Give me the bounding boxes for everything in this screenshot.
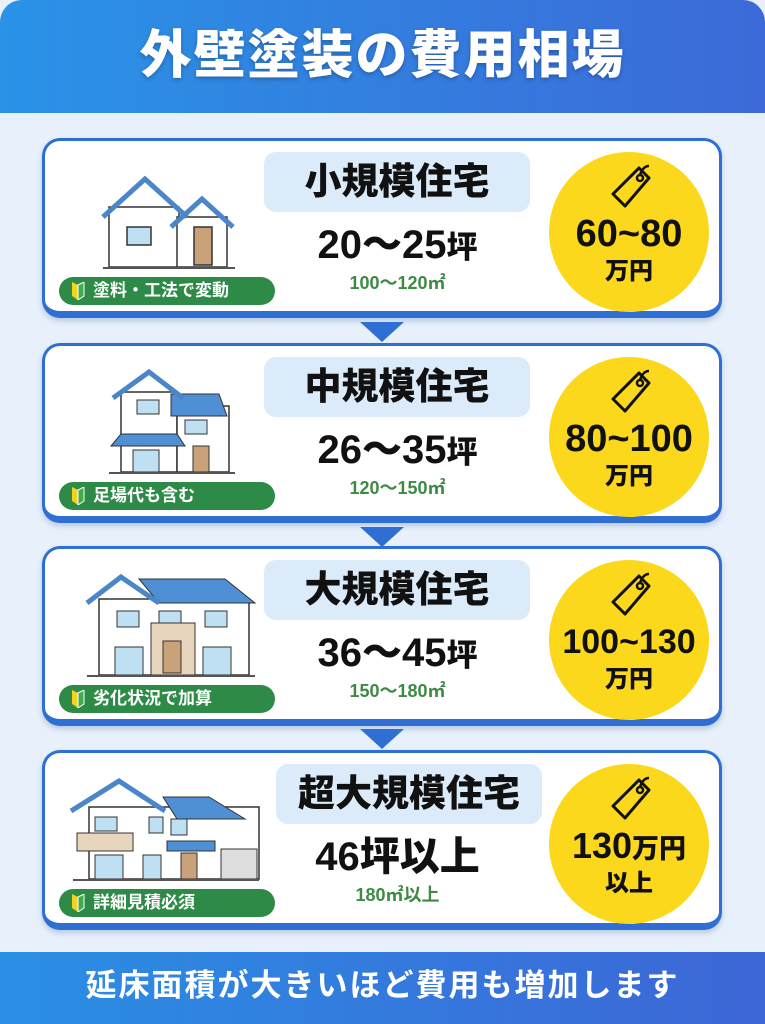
size: 36〜45坪 bbox=[318, 631, 477, 675]
arrow bbox=[360, 729, 404, 749]
price circle bbox=[549, 152, 709, 312]
price circle bbox=[549, 560, 709, 720]
panel: extra large house bbox=[42, 750, 722, 930]
area: 120〜150㎡ bbox=[349, 478, 446, 498]
arrow bbox=[360, 527, 404, 547]
badge: 詳細見積必須 bbox=[93, 893, 195, 912]
heading bbox=[276, 764, 542, 824]
price circle: 万円 bbox=[605, 258, 653, 285]
badge bbox=[59, 482, 275, 510]
price circle bbox=[549, 357, 709, 517]
price circle: 万円 bbox=[605, 463, 653, 490]
panel: large house bbox=[42, 546, 722, 726]
title bbox=[0, 0, 765, 113]
price circle: 60~80 bbox=[576, 213, 682, 255]
icon: large house bbox=[86, 574, 256, 677]
icon: medium house bbox=[109, 368, 235, 474]
badge: 劣化状況で加算 bbox=[93, 689, 212, 708]
area: 150〜180㎡ bbox=[349, 681, 446, 701]
footer banner: 延床面積が大きいほど費用も増加します bbox=[86, 968, 680, 1003]
heading: 小規模住宅 bbox=[304, 161, 490, 202]
badge: 塗料・工法で変動 bbox=[93, 281, 229, 300]
size: 20〜25坪 bbox=[318, 223, 477, 267]
price circle: 100~130 bbox=[562, 623, 696, 661]
badge bbox=[59, 685, 275, 713]
price circle: 以上 bbox=[605, 870, 653, 897]
panel: small house bbox=[42, 138, 722, 318]
badge: 足場代も含む bbox=[93, 486, 195, 505]
heading: 超大規模住宅 bbox=[298, 773, 520, 814]
price circle: 130万円 bbox=[572, 825, 686, 866]
heading bbox=[264, 152, 530, 212]
price circle: 万円 bbox=[605, 666, 653, 693]
panel: medium house bbox=[42, 343, 722, 523]
heading: 中規模住宅 bbox=[304, 366, 490, 407]
size: 26〜35坪 bbox=[318, 428, 477, 472]
heading bbox=[264, 560, 530, 620]
price circle bbox=[549, 764, 709, 924]
price circle: 80~100 bbox=[565, 418, 693, 460]
heading bbox=[264, 357, 530, 417]
badge bbox=[59, 277, 275, 305]
heading: 大規模住宅 bbox=[304, 569, 490, 610]
arrow bbox=[360, 322, 404, 342]
title: 外壁塗装の費用相場 bbox=[139, 27, 626, 85]
icon: small house bbox=[101, 176, 235, 269]
footer banner bbox=[0, 952, 765, 1024]
size: 46坪以上 bbox=[315, 835, 480, 879]
badge bbox=[59, 889, 275, 917]
area: 180㎡以上 bbox=[355, 885, 440, 905]
area: 100〜120㎡ bbox=[349, 273, 446, 293]
icon: extra large house bbox=[70, 778, 260, 881]
